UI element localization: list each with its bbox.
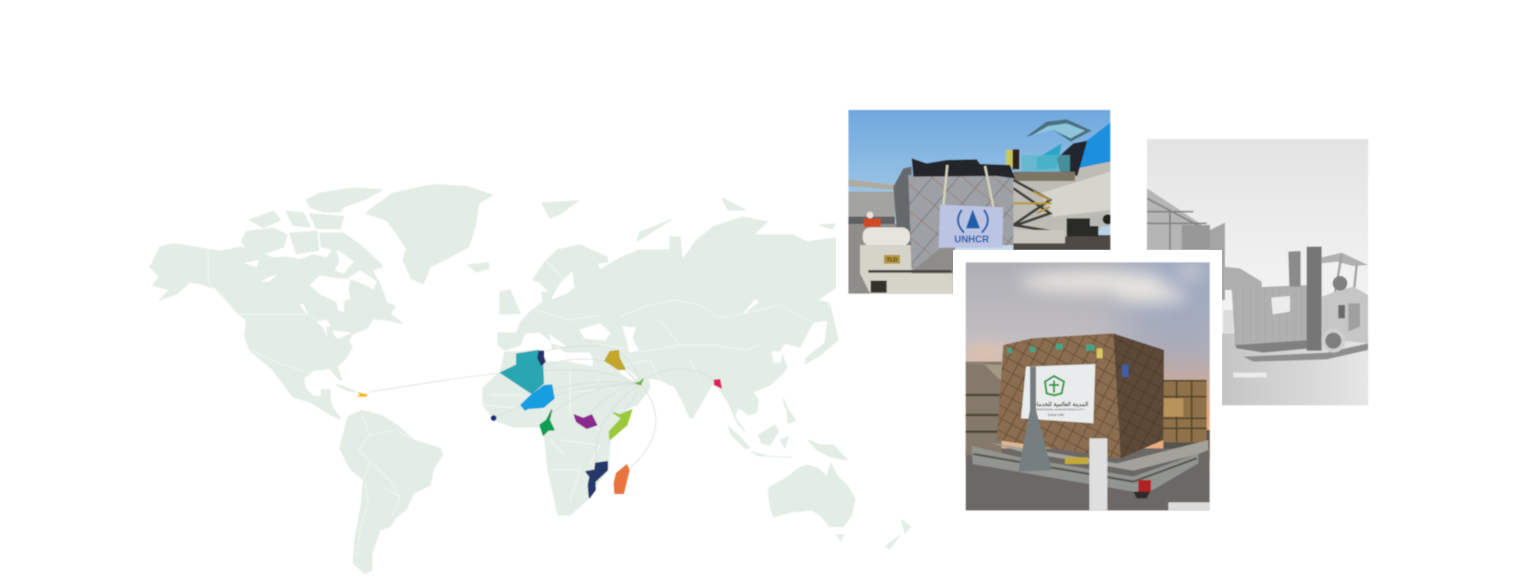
text: vehicle marking: TLD [886,257,897,263]
country: Iraq [605,351,625,369]
landmass: South America [340,411,443,573]
country: Mozambique [586,462,607,498]
clouds [963,268,1203,358]
aircraft [1013,160,1110,237]
loader platform [1013,172,1075,181]
building and ground [848,191,896,218]
vehicle [863,227,910,246]
white mask beside first photo [836,98,850,305]
country: Tunisia [538,351,545,365]
country: Niger [521,385,554,410]
banner [1021,364,1095,423]
crate [1232,285,1310,345]
landmass: Africa [483,350,632,515]
landmass: North America and Greenland [150,185,492,418]
cargo pallet [892,166,912,246]
seas cut from Eurasia [550,300,782,381]
Hudson Bay and lakes [245,250,377,383]
white card behind second photo [953,250,1222,522]
dolly [990,440,1208,471]
warehouse [1146,188,1202,250]
country: Bangladesh [714,379,722,388]
text: UNHCR: UNHCR [954,235,989,246]
background cargo [1163,381,1207,442]
left trailer [966,362,1002,455]
highlighted countries [491,351,722,498]
country: Algeria [501,351,543,393]
photo: grayscale forklift moving cargo [1147,139,1368,405]
photo: International Humanitarian City cargo pallet at dusk: Dubai UAE [1048,413,1065,417]
country: UAE [635,378,643,385]
main cargo [997,333,1121,458]
banner text: المدينة العالمية للخدمات [1032,401,1089,408]
country: Sierra Leone [491,415,496,421]
country: Madagascar [614,465,629,493]
country: Cameroon [540,410,554,435]
white bollard [1089,438,1107,510]
photo: International Humanitarian City cargo pallet at dusk [964,262,1211,512]
forklift [1288,251,1301,287]
infographic canvas [149,109,1369,574]
country: Haiti [356,392,367,397]
UNHCR flag [939,205,1003,248]
photo: UNHCR cargo loading onto KLM aircraft [848,110,1113,294]
landmass: Eurasia [498,198,838,432]
flight routes from the UAE hub [368,346,715,470]
country: South Sudan [574,415,597,428]
landmass: Australia and Oceania [728,398,911,548]
jack stand [1018,367,1052,472]
world map [150,185,911,573]
photo: International Humanitarian City cargo pallet at dusk: INTERNATIONAL HUMANITARIAN CITY [1030,408,1085,412]
banner logo [1045,376,1064,395]
country: Somalia [609,410,632,439]
